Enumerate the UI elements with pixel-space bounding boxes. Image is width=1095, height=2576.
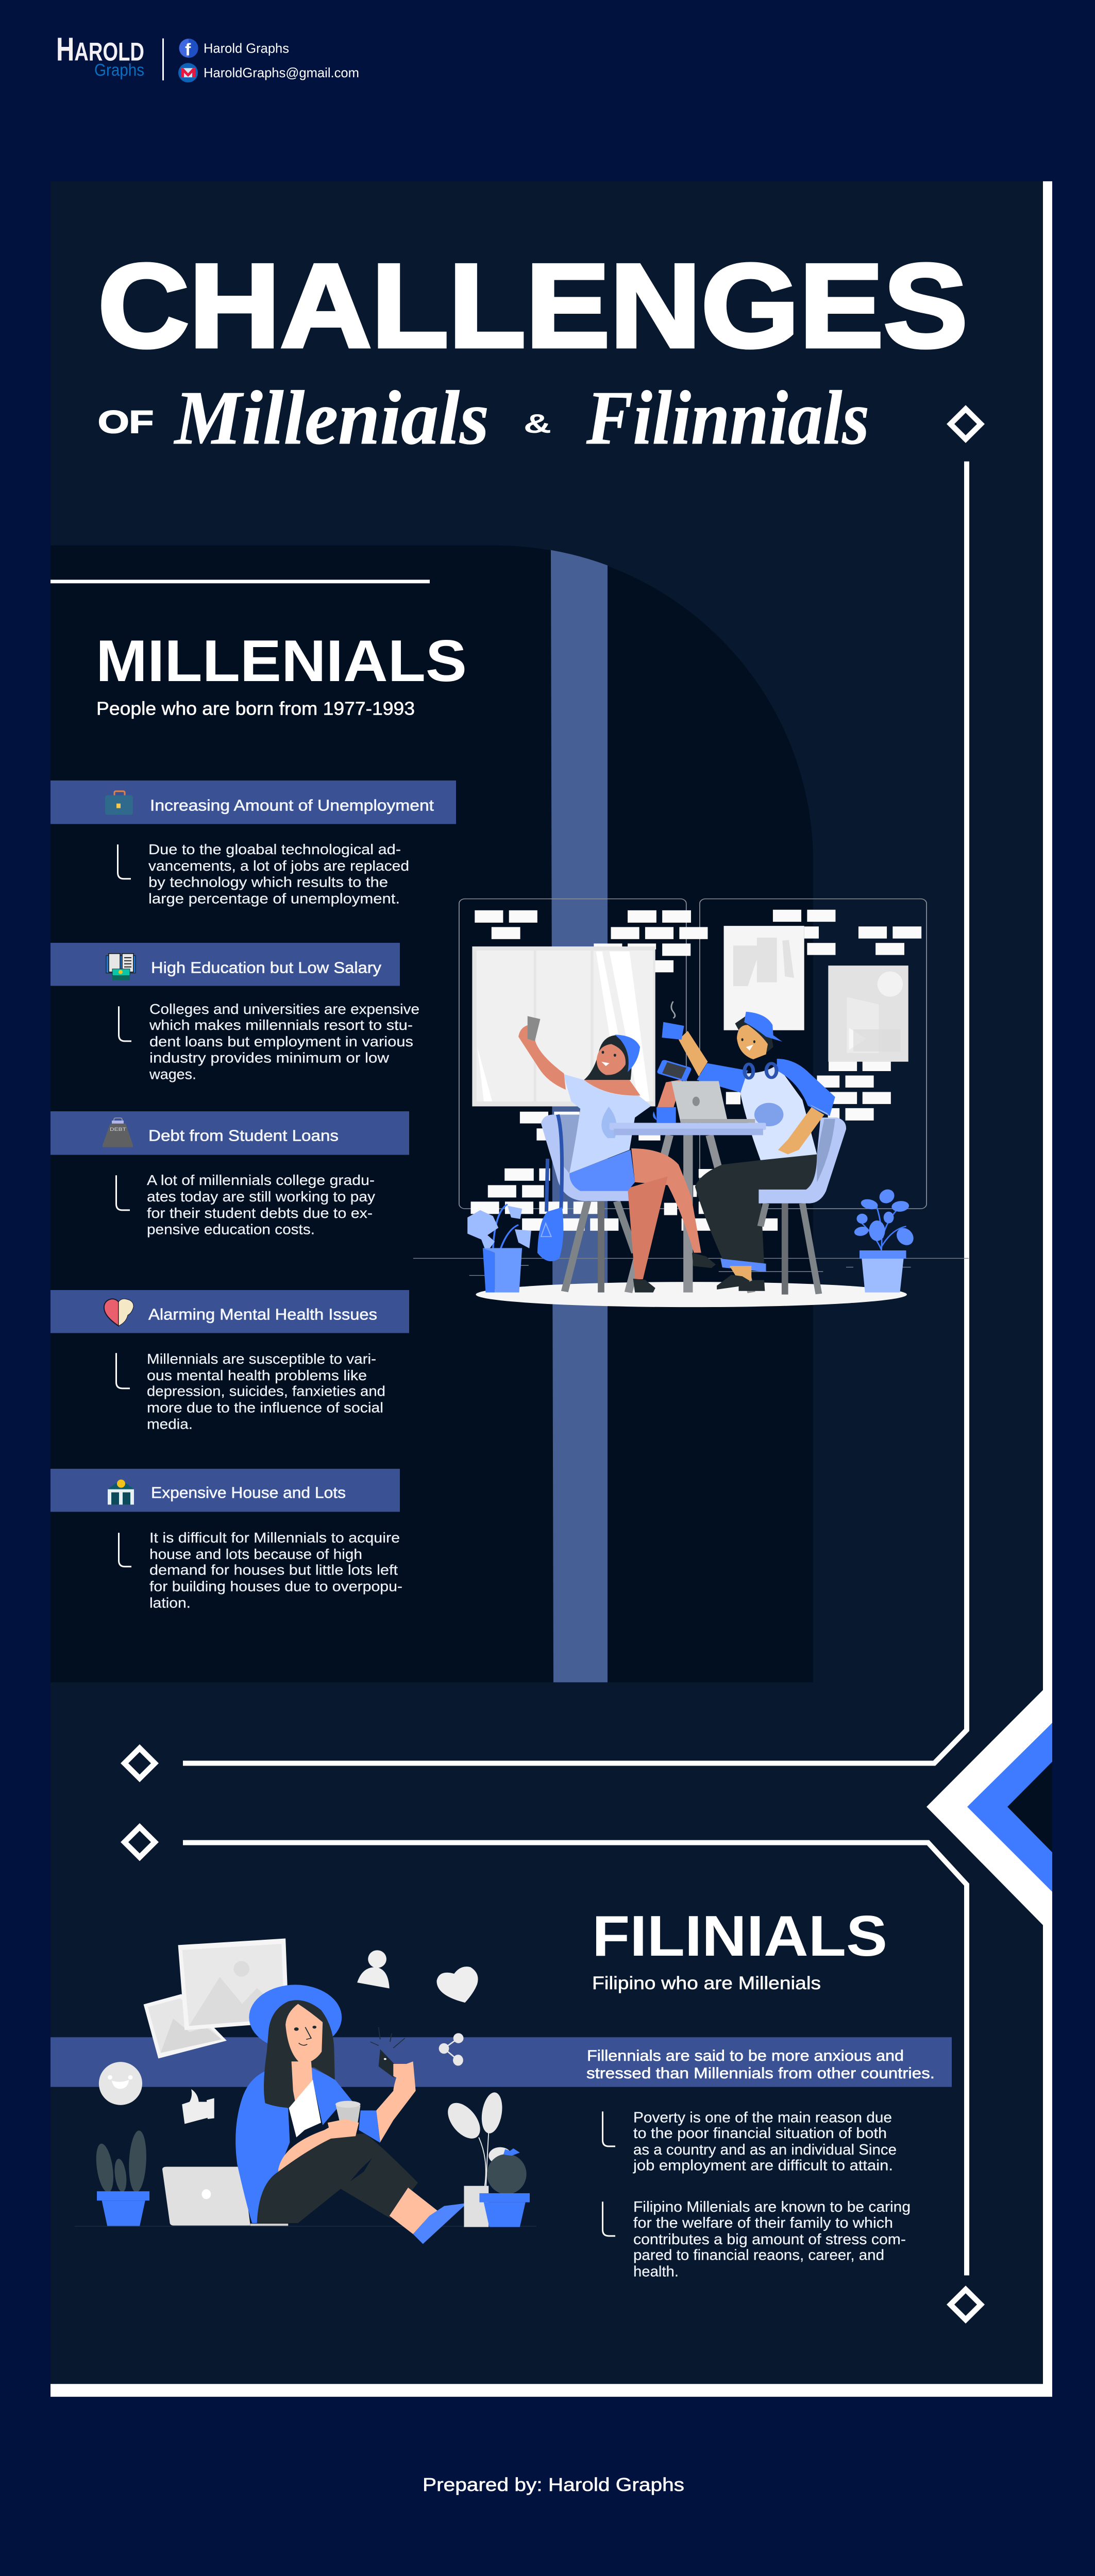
wall frames bbox=[459, 899, 926, 1209]
picture front bbox=[178, 1939, 289, 2030]
man cuff and shoes bbox=[717, 1259, 766, 1291]
connector line: lower bbox=[183, 1843, 967, 2276]
banner bar bbox=[50, 2037, 952, 2087]
contact: facebook name: Harold Graphs bbox=[204, 41, 289, 56]
logo: Harold Graphs bbox=[56, 30, 144, 80]
title: CHALLENGES: CHALLENGES bbox=[98, 240, 968, 372]
icon: diamond left lower bbox=[121, 1823, 159, 1861]
bracket bbox=[119, 1006, 131, 1041]
wall bricks bbox=[471, 910, 921, 1231]
chevron arrow bbox=[926, 1690, 1052, 1925]
body text two bbox=[633, 2199, 911, 2280]
table mug bbox=[653, 1107, 676, 1123]
body text: Millennials are susceptible to vari- bbox=[147, 1351, 376, 1367]
body text one: to the poor financial situation of both bbox=[633, 2125, 887, 2142]
vertical stripe bbox=[551, 550, 608, 1682]
woman raised arm and phone bbox=[518, 1016, 566, 1090]
arm with phone bbox=[359, 2027, 416, 2143]
icon: briefcase bbox=[105, 791, 133, 815]
ankle bbox=[390, 2188, 437, 2234]
icon: profile bbox=[357, 1950, 390, 1989]
header bar bbox=[50, 1469, 400, 1512]
header bar bbox=[50, 1111, 409, 1155]
laptop bbox=[671, 1081, 755, 1123]
tote bag bbox=[537, 1114, 563, 1261]
body text: for building houses due to overpopu- bbox=[149, 1579, 402, 1594]
headphones bbox=[745, 1063, 777, 1078]
bracket two bbox=[603, 2201, 615, 2236]
main panel background bbox=[50, 181, 1043, 2384]
bracket bbox=[116, 1353, 130, 1388]
subtitle: ampersand: & bbox=[524, 409, 551, 438]
icon: book and money bbox=[106, 954, 136, 980]
hat bbox=[249, 1985, 342, 2050]
left cactus pot bbox=[93, 2130, 149, 2227]
body text: Colleges and universities are expensive bbox=[149, 1001, 419, 1017]
body text: by technology which results to the bbox=[148, 874, 388, 890]
body text: which makes millennials resort to stu- bbox=[149, 1017, 413, 1033]
poster left bbox=[724, 926, 804, 1030]
header bar bbox=[50, 781, 456, 824]
subtitle: Millenials: Millenials bbox=[174, 376, 489, 461]
left plant bbox=[467, 1204, 531, 1293]
body text: It is difficult for Millennials to acquire bbox=[149, 1530, 400, 1546]
illustration: couple at cafe table bbox=[413, 899, 969, 1307]
panel: filinials text bbox=[50, 1904, 952, 2280]
bracket bbox=[117, 844, 131, 879]
arm with cup bbox=[278, 2101, 361, 2172]
woman head bbox=[584, 1035, 640, 1080]
item: high education low salary bbox=[50, 943, 419, 1082]
body text one: job employment are difficult to attain. bbox=[633, 2158, 893, 2174]
ground line bbox=[75, 2226, 536, 2227]
body text: more due to the influence of social bbox=[147, 1400, 383, 1416]
body text: depression, suicides, fanxieties and bbox=[147, 1383, 385, 1399]
body text: vancements, a lot of jobs are replaced bbox=[148, 858, 409, 874]
icon: diamond bottom right bbox=[947, 2285, 985, 2324]
icon: email bbox=[178, 63, 198, 82]
body text: ates today are still working to pay bbox=[147, 1189, 375, 1205]
heading: MILLENIALS: MILLENIALS bbox=[96, 628, 467, 694]
item title: Increasing Amount of Unemployment bbox=[150, 796, 434, 815]
item: increasing unemployment bbox=[50, 781, 456, 906]
subtitle: OF: OF bbox=[98, 404, 154, 440]
man torso bbox=[697, 1059, 835, 1160]
body text bbox=[148, 841, 409, 906]
header bar bbox=[50, 943, 400, 986]
poster right bbox=[828, 965, 908, 1062]
banner text: stressed than Millennials from other countries. bbox=[586, 2065, 935, 2082]
logo: Harold Graphs: Graphs bbox=[94, 60, 144, 80]
body text: wages. bbox=[149, 1066, 196, 1082]
man raised arm and mug bbox=[662, 1002, 707, 1076]
man head bbox=[735, 1012, 782, 1059]
body text: demand for houses but little lots left bbox=[149, 1562, 398, 1578]
body text: dent loans but employment in various bbox=[149, 1033, 413, 1049]
body text one bbox=[633, 2109, 897, 2174]
body text: large percentage of unemployment. bbox=[148, 891, 400, 906]
floor ellipse bbox=[476, 1282, 907, 1307]
banner text: Fillennials are said to be more anxious and bbox=[587, 2047, 904, 2064]
divider line above heading bbox=[50, 580, 430, 583]
body text bbox=[147, 1172, 375, 1238]
face bbox=[285, 2004, 323, 2064]
contact divider bbox=[162, 39, 164, 80]
icon: facebook bbox=[179, 39, 198, 59]
icon: heart and brain bbox=[104, 1299, 133, 1326]
body text: for their student debts due to ex- bbox=[147, 1205, 373, 1221]
body text one: Poverty is one of the main reason due bbox=[633, 2109, 892, 2126]
heading: FILINIALS: FILINIALS bbox=[592, 1904, 887, 1968]
body text one: as a country and as an individual Since bbox=[633, 2142, 897, 2158]
footer: prepared by: Prepared by: Harold Graphs bbox=[423, 2475, 684, 2495]
body text two: contributes a big amount of stress com- bbox=[633, 2231, 906, 2248]
woman legs bbox=[628, 1148, 716, 1293]
title block bbox=[98, 240, 968, 461]
pants bbox=[257, 2133, 418, 2223]
body text bbox=[149, 1530, 402, 1611]
window bbox=[472, 946, 655, 1106]
body text: media. bbox=[147, 1416, 193, 1432]
panel: millenials dark backdrop bbox=[50, 546, 813, 1682]
icon: house bbox=[108, 1480, 134, 1504]
icon: debt weight: DEBT bbox=[110, 1127, 127, 1132]
logo: Harold Graphs: HAROLD bbox=[56, 30, 144, 67]
icon: heart bbox=[436, 1967, 478, 2003]
right plant bbox=[853, 1188, 916, 1293]
panel: millenials content bbox=[50, 580, 467, 1611]
jacket bbox=[235, 2067, 354, 2223]
bracket one bbox=[603, 2111, 615, 2146]
woman forearm and console bbox=[656, 1059, 692, 1109]
body text: ous mental health problems like bbox=[147, 1367, 367, 1383]
icon: debt weight bbox=[103, 1118, 133, 1147]
picture back bbox=[144, 1994, 227, 2059]
body text: Due to the gloabal technological ad- bbox=[148, 841, 401, 857]
subtitle: Filinnials: Filinnials bbox=[586, 376, 869, 461]
item title: High Education but Low Salary bbox=[151, 959, 382, 977]
table legs bbox=[628, 1135, 751, 1293]
item title: Debt from Student Loans bbox=[148, 1127, 339, 1145]
body text two: health. bbox=[633, 2264, 679, 2280]
right chair bbox=[759, 1117, 846, 1295]
body text bbox=[147, 1351, 385, 1432]
white planter bbox=[464, 2186, 488, 2227]
icon: diamond top right bbox=[947, 405, 985, 443]
neck and shirt bbox=[289, 2061, 321, 2138]
banner text bbox=[586, 2047, 935, 2082]
body text: pensive education costs. bbox=[147, 1222, 315, 1238]
man pants bbox=[695, 1154, 817, 1264]
right cactus pot bbox=[479, 2148, 530, 2227]
item: debt from student loans bbox=[50, 1111, 409, 1238]
laptop bbox=[162, 2167, 288, 2226]
icon: facebook: f bbox=[185, 40, 191, 59]
body text: industry provides minimum or low bbox=[149, 1050, 390, 1066]
item title: Expensive House and Lots bbox=[151, 1484, 346, 1502]
illustration: woman with phone bbox=[75, 1939, 536, 2244]
item: alarming mental health bbox=[50, 1290, 409, 1432]
icon: share bbox=[439, 2033, 463, 2065]
connector line: upper bbox=[183, 462, 967, 1763]
body text two: for the welfare of their family to which bbox=[633, 2215, 893, 2231]
body text two: pared to financial reaons, career, and bbox=[633, 2247, 884, 2264]
table top bbox=[610, 1123, 766, 1135]
panel frame: right and bottom white bars bbox=[50, 181, 1052, 2397]
icon: diamond left upper bbox=[121, 1744, 159, 1782]
header bar bbox=[50, 1290, 409, 1333]
center table leg bbox=[681, 1135, 695, 1293]
contact: email address: HaroldGraphs@gmail.com bbox=[204, 66, 359, 80]
header: logo and contacts bbox=[56, 30, 359, 82]
bracket bbox=[119, 1533, 131, 1567]
body text: A lot of millennials college gradu- bbox=[147, 1172, 375, 1188]
left chair bbox=[541, 1114, 646, 1293]
item: expensive house and lots bbox=[50, 1469, 402, 1611]
body text: house and lots because of high bbox=[149, 1546, 362, 1562]
right plants bbox=[441, 2092, 512, 2187]
woman torso bbox=[563, 1074, 651, 1191]
man arm down bbox=[778, 1107, 824, 1154]
shoe bbox=[413, 2203, 467, 2244]
floor line bbox=[413, 1258, 969, 1276]
body text bbox=[149, 1001, 419, 1082]
hair bbox=[264, 2000, 335, 2108]
bracket bbox=[116, 1175, 130, 1210]
subheading: Filipino who are Millenials bbox=[592, 1973, 821, 1993]
body text two: Filipino Millenials are known to be caring bbox=[633, 2199, 911, 2215]
item title: Alarming Mental Health Issues bbox=[148, 1306, 377, 1324]
icon: thumbs up bbox=[182, 2089, 214, 2124]
body text: lation. bbox=[149, 1595, 191, 1611]
subheading: birth years: People who are born from 1977-1993 bbox=[96, 699, 415, 719]
icon: smile bbox=[99, 2062, 142, 2105]
